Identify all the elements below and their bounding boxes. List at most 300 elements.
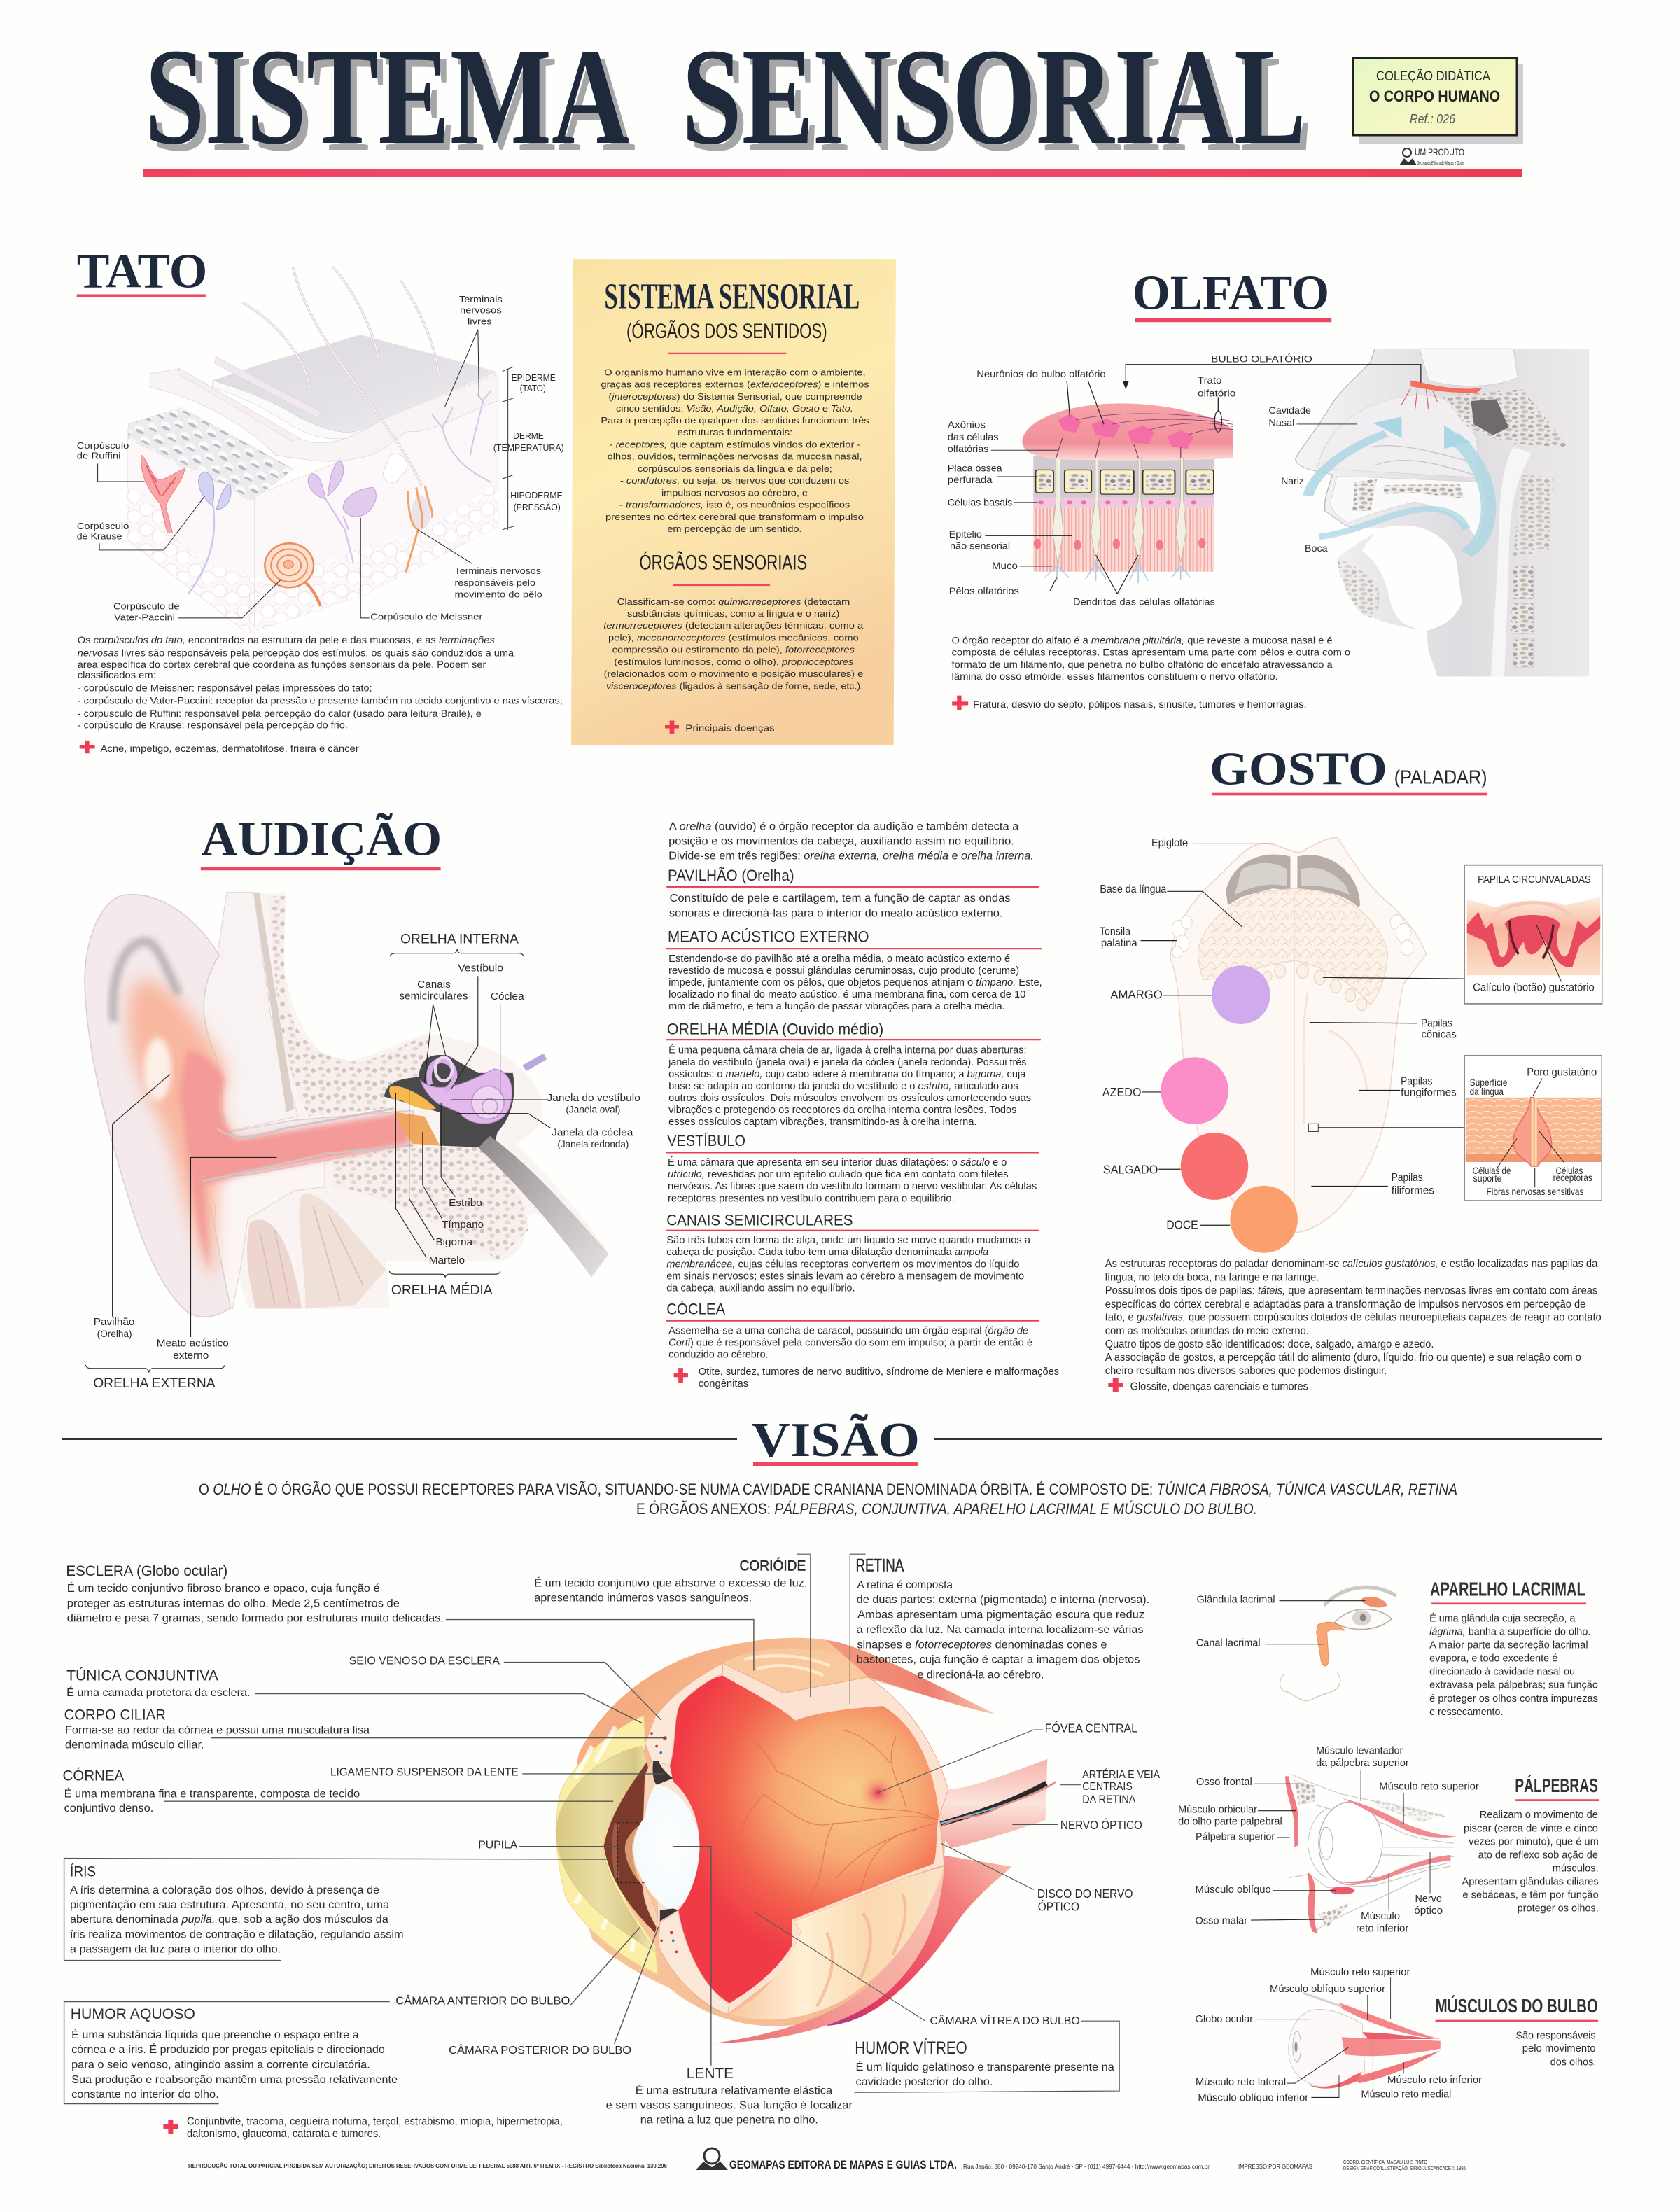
- skin labels: DERME: [513, 430, 544, 441]
- text: aparelho lacrimal: evapora, e todo excedente é: [1429, 1652, 1558, 1664]
- panel: visao: [62, 1413, 1602, 2043]
- icon: red cross with visao diseases: [163, 2116, 563, 2140]
- skin labels: (PRESSÃO): [514, 502, 561, 512]
- panel: tato: [77, 244, 564, 755]
- title: Sistema Sensorial: SENSORIAL: [688, 27, 1312, 180]
- text: classification: visceroceptores (ligados à sensação de fome, sede, etc.).: [606, 681, 863, 692]
- text: olfato description: lâmina do osso etmóide; esses filamentos constituem o nervo olfatório.: [952, 671, 1278, 682]
- text: aparelho lacrimal: extravasa pela pálpebras; sua função: [1429, 1679, 1598, 1690]
- collection badge: [1353, 58, 1523, 144]
- lacrimal labels: [1196, 1593, 1365, 1648]
- text: audicao intro: A orelha (ouvido) é o órgão receptor da audição e também detecta a: [669, 820, 1019, 832]
- eyelid labels: Nervo: [1415, 1893, 1442, 1905]
- section: meato acustico externo: [666, 927, 1042, 1011]
- section: orelha media: É uma pequena câmara cheia de ar, ligada à orelha interna por duas aberturas:: [668, 1043, 1027, 1056]
- text: olfato description: [952, 636, 1350, 682]
- lacrimal labels: Glândula lacrimal: [1197, 1593, 1275, 1605]
- text: gosto description: Quatro tipos de gosto são identificados: doce, salgado, amargo e azedo.: [1105, 1338, 1434, 1350]
- icon: red cross with tato diseases: Acne, impetigo, eczemas, dermatofitose, frieira e câncer: [101, 743, 359, 755]
- olfato labels: olfatórias: [948, 444, 988, 454]
- text box: humor aquoso: córnea e a íris. É produzido por pregas epiteliais e direcionado: [71, 2043, 385, 2056]
- label: disco do nervo optico: [941, 1843, 1133, 1914]
- skin labels: EPIDERME: [512, 372, 556, 383]
- olfato labels: BULBO OLFATÓRIO: [1211, 354, 1312, 365]
- text: palpebras: Realizam o movimento de: [1480, 1809, 1598, 1820]
- text: gosto description: com as moléculas oriundas do meio externo.: [1105, 1325, 1309, 1337]
- section: orelha media: janela do vestíbulo (janela oval) e janela da cóclea (janela redonda). Possui três: [668, 1056, 1027, 1068]
- audicao labels: ORELHA EXTERNA: [93, 1376, 216, 1390]
- eyelid labels: Músculo reto superior: [1379, 1780, 1480, 1792]
- eye muscle labels: Músculo reto medial: [1362, 2088, 1451, 2100]
- section: vestibulo: É uma câmara que apresenta em seu interior duas dilatações: o sáculo e o: [668, 1156, 1007, 1168]
- gosto labels: Tonsila: [1100, 926, 1131, 938]
- eye muscle labels: [1196, 1966, 1483, 2104]
- skin labels: responsáveis pelo: [455, 578, 536, 588]
- skin labels: Terminais: [459, 294, 503, 304]
- inset: papila circunvaladas: Calículo (botão) gustatório: [1473, 982, 1595, 994]
- text: gosto description: tato, e gustativas, que possuem corpúsculos dotados de células neuroepiteliais capazes de reagir ao contato: [1105, 1311, 1602, 1324]
- olfato labels: Dendritos das células olfatórias: [1073, 596, 1215, 608]
- text: gosto description: específicas do córtex cerebral e adaptadas para a transformação de impulsos nervosos em percepção de: [1105, 1298, 1586, 1310]
- olfato labels: Trato: [1198, 375, 1222, 386]
- text: lente: na retina a luz que penetra no olho.: [640, 2114, 818, 2127]
- illustration: tongue: [1170, 837, 1427, 1233]
- olfato labels: Boca: [1305, 543, 1328, 554]
- text: intro: estruturas fundamentais:: [678, 428, 792, 438]
- text: aparelho lacrimal: APARELHO LACRIMAL: [1430, 1579, 1586, 1600]
- section: canais semicirculares: [666, 1212, 1039, 1294]
- gosto labels: AMARGO: [1110, 988, 1163, 1002]
- text box: iris: ÍRIS: [70, 1864, 96, 1880]
- label: nervo optico: NERVO ÓPTICO: [1060, 1818, 1142, 1833]
- illustration: eyelids section: [1285, 1774, 1457, 1933]
- panel: olfato: [948, 266, 1589, 710]
- text: tato description: - corpúsculo de Meissner: responsável pelas impressões do tato;: [78, 683, 372, 694]
- text: gosto description: cheiro resultam nos diversos sabores que podemos distinguir.: [1105, 1365, 1387, 1377]
- icon: red cross with visao diseases: Conjuntivite, tracoma, cegueira noturna, terçol, estrabismo, miopia, hipermetropia,: [187, 2116, 563, 2128]
- panel: audicao text: [666, 820, 1059, 1389]
- olfato labels: das células: [948, 432, 999, 442]
- taste zones: [1161, 965, 1298, 1253]
- eye muscle labels: Músculo reto superior: [1310, 1966, 1410, 1977]
- inset: papila fungiforme: receptoras: [1553, 1172, 1592, 1183]
- audicao labels: ORELHA INTERNA: [400, 931, 519, 946]
- icon: red cross with gosto diseases: [1108, 1378, 1308, 1393]
- text: retina: bastonetes, cuja função é captar a imagem dos objetos: [857, 1653, 1140, 1665]
- text: palpebras: e sebáceas, e têm por função: [1462, 1889, 1599, 1900]
- text: classification: (relacionados com o movimento e posição musculares) e: [604, 669, 863, 679]
- illustration: eye muscles: [1289, 1993, 1441, 2089]
- section: vestibulo: [666, 1133, 1040, 1204]
- text: retina: a reflexão da luz. Na camada interna localizam-se várias: [857, 1623, 1144, 1636]
- skin labels: de Ruffini: [77, 451, 120, 461]
- collection badge: O CORPO HUMANO: [1369, 88, 1500, 105]
- title: Sistema Sensorial: [145, 20, 1312, 180]
- text: classification: compressão ou estiramento da pele), fotorreceptores: [612, 645, 855, 655]
- eye muscle labels: Globo ocular: [1196, 2012, 1254, 2024]
- copyright note: REPRODUÇÃO TOTAL OU PARCIAL PROIBIDA SEM AUTORIZAÇÃO; DIREITOS RESERVADOS CONFORME LEI FEDERAL 5988 ART. 6º ITEM IX - REGISTRO Biblioteca Nacional 130.296: [188, 2163, 668, 2169]
- text box: humor vitreo: cavidade posterior do olho.: [855, 2076, 993, 2088]
- text: audicao intro: posição e os movimentos da cabeça, auxiliando assim no equilíbrio.: [668, 834, 1014, 847]
- audicao labels: Bigorna: [435, 1236, 473, 1248]
- eyelid labels: [1178, 1744, 1480, 1934]
- label: seio venoso: SEIO VENOSO DA ESCLERA: [349, 1654, 500, 1667]
- label: ligamento suspensor: LIGAMENTO SUSPENSOR DA LENTE: [330, 1766, 519, 1779]
- skin labels: livres: [468, 316, 492, 327]
- text: corpo ciliar: CORPO CILIAR: [64, 1707, 166, 1723]
- text box: humor aquoso: Sua produção e reabsorção mantêm uma pressão relativamente: [71, 2073, 398, 2086]
- text: lente: [606, 1847, 853, 2127]
- text: aparelho lacrimal: direcionado à cavidade nasal ou: [1429, 1665, 1575, 1677]
- text: palpebras: proteger os olhos.: [1518, 1902, 1599, 1914]
- label: fovea central: FÓVEA CENTRAL: [1045, 1721, 1138, 1735]
- text: classification: pele), mecanorreceptores (estímulos mecânicos, como: [608, 633, 859, 643]
- text: classification: susbtâncias químicas, como a língua e o nariz): [627, 609, 839, 620]
- icon: red cross with audicao diseases: Otite, surdez, tumores de nervo auditivo, síndrome de Meniere e malformações: [699, 1366, 1059, 1377]
- inset: papila fungiforme: da língua: [1470, 1086, 1504, 1097]
- section: meato acustico externo: impede, juntamente com os pêlos, que objetos pequenos atinjam o tímpano. Este,: [668, 976, 1042, 988]
- text box: iris: pigmentação em sua estrutura. Apresenta, no seu centro, uma: [70, 1898, 389, 1911]
- text: gosto description: A associação de gostos, a percepção tátil do alimento (duro, líquido, frio ou quente) e sua relação com o: [1105, 1352, 1581, 1364]
- inset: papila fungiforme: Superfície: [1470, 1077, 1507, 1088]
- audicao labels: Tímpano: [442, 1219, 484, 1231]
- section: vestibulo: nervósos. As fibras que saem do vestíbulo formam o nervo vestibular. As células: [668, 1180, 1037, 1192]
- text: intro: corpúsculos sensoriais da língua e da pele;: [638, 464, 832, 475]
- eyelid labels: Pálpebra superior: [1196, 1830, 1275, 1842]
- text: lente: É uma estrutura relativamente elástica: [636, 2083, 832, 2096]
- text: tato description: - corpúsculo de Vater-Paccini: receptor da pressão e presente também no tecido conjuntivo e nas vísceras;: [78, 696, 563, 706]
- eyelid labels: Músculo orbicular: [1178, 1803, 1258, 1815]
- section: orelha media: vibrações e protegendo os receptores da orelha interna contra lesões. Todos: [668, 1104, 1016, 1115]
- section: orelha media: outros dois ossículos. Dois músculos envolvem os ossículos amortecendo suas: [668, 1092, 1031, 1103]
- skin labels: Vater-Paccini: [114, 612, 175, 623]
- heading: Gosto: [1210, 744, 1488, 795]
- inset: papila fungiforme: suporte: [1474, 1172, 1502, 1184]
- inset: papila fungiforme: Fibras nervosas sensitivas: [1487, 1186, 1583, 1197]
- text: gosto description: [1105, 1258, 1602, 1377]
- publisher address: Rua Japão, 380 - 09240-170 Santo André - SP - (011) 4997-6444 - http://www.geomapas.com.br: [963, 2164, 1210, 2170]
- text: retina: RETINA: [855, 1555, 904, 1575]
- icon: red cross with olfato diseases: Fratura, desvio do septo, pólipos nasais, sinusite, tumores e hemorragias.: [973, 699, 1307, 710]
- audicao labels: Canais: [417, 979, 451, 990]
- skin labels: Corpúsculo: [77, 440, 129, 451]
- olfato labels: Células basais: [948, 498, 1012, 508]
- text: cornea: [62, 1768, 613, 1814]
- eyelid labels: Osso malar: [1196, 1914, 1248, 1926]
- text: intro: - transformadores, isto é, os neurônios específicos: [620, 500, 850, 510]
- skin labels: movimento do pêlo: [455, 589, 542, 599]
- section: meato acustico externo: Estendendo-se do pavilhão até a orelha média, o meato acústico externo é: [668, 953, 1010, 964]
- audicao labels: (Janela oval): [566, 1104, 620, 1115]
- illustration: eyeball cross-section: [556, 1638, 1056, 2043]
- gosto labels: SALGADO: [1103, 1163, 1158, 1177]
- section: pavilhao: [666, 867, 1039, 919]
- panel title: SISTEMA SENSORIAL: [604, 275, 860, 316]
- section: meato acustico externo: MEATO ACÚSTICO EXTERNO: [668, 927, 869, 946]
- text: olfato description: composta de células receptoras. Estas apresentam uma parte com pêlos e outra com o: [952, 647, 1350, 658]
- gosto labels: Papilas: [1421, 1018, 1452, 1030]
- icon: red cross with audicao diseases: [674, 1366, 1059, 1389]
- text: tunica conjuntiva: [66, 1668, 643, 1723]
- section: canais semicirculares: membranácea, cujas células receptoras convertem os movimentos do líquido: [666, 1258, 1020, 1270]
- text: tato description: - corpúsculo de Krause: responsável pela percepção do frio.: [78, 720, 348, 731]
- text: audicao intro: [668, 820, 1034, 862]
- section: pavilhao: sonoras e direcioná-las para o interior do meato acústico externo.: [669, 907, 1002, 919]
- icon: red cross with audicao diseases: congênitas: [699, 1378, 748, 1389]
- label: arteria e veia: [1060, 1768, 1160, 1805]
- text: retina: sinapses e fotorreceptores denominadas cones e: [857, 1638, 1107, 1651]
- section: meato acustico externo: mm de diâmetro, e tem a função de passar vibrações para a orelha média.: [668, 1000, 1005, 1011]
- text: retina: Ambas apresentam uma pigmentação escura que reduz: [858, 1608, 1144, 1620]
- text: intro: - receptores, que captam estímulos vindos do exterior -: [610, 440, 860, 450]
- audicao labels: Vestíbulo: [458, 962, 503, 974]
- illustration: ear cross-section: [85, 892, 609, 1317]
- text: aparelho lacrimal: lágrima, banha a superfície do olho.: [1429, 1625, 1590, 1637]
- text: tunica conjuntiva: É uma camada protetora da esclera.: [66, 1686, 251, 1699]
- section: canais semicirculares: CANAIS SEMICIRCULARES: [666, 1212, 853, 1229]
- olfato labels: Muco: [992, 561, 1018, 571]
- skin block illustration: [127, 267, 498, 634]
- credits: COORD. CIENTÍFICA: MAGALI LUÍS PINTO: [1343, 2159, 1427, 2165]
- text: aparelho lacrimal: é proteger os olhos contra impurezas: [1429, 1692, 1598, 1704]
- icon: red cross with olfato diseases: [952, 696, 1307, 710]
- eyelid labels: Músculo levantador: [1316, 1744, 1404, 1756]
- text: gosto description: língua, no teto da boca, na faringe e na laringe.: [1105, 1272, 1319, 1284]
- audicao labels: (Orelha): [97, 1329, 132, 1339]
- text: visao intro: E ÓRGÃOS ANEXOS: PÁLPEBRAS, CONJUNTIVA, APARELHO LACRIMAL E MÚSCULO DO BULBO.: [636, 1500, 1257, 1518]
- section: orelha media: ossículos: o martelo, cujo cabo adere à membrana do tímpano; a bigorna, cuja: [668, 1068, 1027, 1079]
- text: musculos do bulbo: pelo movimento: [1522, 2043, 1596, 2054]
- audicao labels: externo: [173, 1350, 209, 1362]
- text box: humor vitreo: HUMOR VÍTREO: [855, 2038, 967, 2058]
- label: fovea central: [878, 1721, 1138, 1793]
- text box: humor aquoso: É uma substância líquida que preenche o espaço entre a: [71, 2028, 359, 2041]
- olfato labels: Epitélio: [949, 529, 982, 540]
- skin labels: HIPODERME: [510, 490, 563, 500]
- audicao labels: ORELHA MÉDIA: [391, 1282, 493, 1297]
- skin labels: Corpúsculo de Meissner: [370, 611, 483, 622]
- text: musculos do bulbo: MÚSCULOS DO BULBO: [1436, 1996, 1598, 2017]
- text: aparelho lacrimal: e ressecamento.: [1429, 1706, 1503, 1717]
- label: disco do nervo optico: ÓPTICO: [1038, 1900, 1079, 1914]
- gosto labels: Papilas: [1401, 1076, 1432, 1088]
- section: coclea: Corti ) que é responsável pela conversão do som em impulso; a partir de então é: [668, 1336, 1032, 1348]
- text: retina: A retina é composta: [857, 1578, 953, 1590]
- audicao labels: Meato acústico: [157, 1337, 229, 1349]
- eyelid labels: óptico: [1414, 1905, 1443, 1917]
- panel title: [604, 275, 860, 354]
- eye muscle labels: Músculo reto inferior: [1387, 2074, 1483, 2085]
- gosto labels: Epiglote: [1152, 837, 1188, 849]
- header: [144, 20, 1523, 180]
- olfato labels: perfurada: [948, 475, 993, 485]
- text: tato description: classificados em:: [78, 670, 156, 681]
- icon: red cross with visao diseases: daltonismo, glaucoma, catarata e tumores.: [187, 2128, 381, 2140]
- text box: humor aquoso: constante no interior do olho.: [71, 2088, 219, 2101]
- gosto labels: cônicas: [1422, 1028, 1457, 1041]
- text: musculos do bulbo: [1436, 1996, 1598, 2068]
- collection badge: Ref.: 026: [1410, 112, 1456, 126]
- eyelid labels: Músculo: [1361, 1910, 1400, 1921]
- gosto labels: Base da língua: [1100, 883, 1167, 896]
- text: esclera: É um tecido conjuntivo fibroso branco e opaco, cuja função é: [67, 1581, 380, 1595]
- section: vestibulo: receptoras presentes no vestíbulo contribuem para o equilíbrio.: [668, 1193, 955, 1204]
- text box: iris: íris realiza movimentos de contração e dilatação, regulando assim: [70, 1928, 404, 1940]
- text: intro: [601, 368, 869, 534]
- text box: iris: a passagem da luz para o interior do olho.: [70, 1942, 281, 1955]
- audicao labels: Janela do vestíbulo: [547, 1092, 640, 1104]
- publisher mark: UM PRODUTO: [1415, 146, 1464, 158]
- olfato labels: Pêlos olfatórios: [949, 586, 1019, 596]
- text: cornea: conjuntivo denso.: [64, 1802, 153, 1814]
- section: coclea: Assemelha-se a uma concha de caracol, possuindo um órgão espiral ( órgão de: [668, 1324, 1028, 1336]
- label: pupila: PUPILA: [478, 1839, 518, 1851]
- audicao labels: semicirculares: [399, 990, 468, 1002]
- section: meato acustico externo: localizado no final do meato acústico, é uma membrana fina, com cerca de 10: [668, 988, 1026, 1000]
- inset: papila fungiforme: Células de: [1473, 1165, 1511, 1176]
- text: classification: (estímulos luminosos, como o olho), proprioceptores: [614, 657, 854, 668]
- credits: DESIGN GRÁFICO/ILUSTRAÇÃO: SIRIO JUSCANCADE © 1995: [1343, 2165, 1466, 2171]
- audicao labels: [85, 931, 640, 1390]
- text: intro: O organismo humano vive em interação com o ambiente,: [604, 368, 866, 378]
- skin labels: (TATO): [520, 383, 546, 393]
- text: classification: [603, 597, 864, 692]
- inset: papila fungiforme: Células: [1556, 1165, 1583, 1176]
- section: orelha media: [666, 1021, 1041, 1127]
- text: olfato description: formato de um filamento, que penetra no bulbo olfatório do encéfalo atravessando a: [952, 659, 1333, 670]
- olfato labels: olfatório: [1198, 388, 1236, 399]
- text: musculos do bulbo: dos olhos.: [1550, 2056, 1596, 2068]
- inset: papila circunvaladas: PAPILA CIRCUNVALADAS: [1478, 874, 1591, 885]
- text: intro: cinco sentidos: Visão, Audição, Olfato, Gosto e Tato.: [616, 403, 853, 414]
- panel: gosto: [1100, 744, 1602, 1393]
- text: visao intro: [199, 1480, 1457, 1518]
- heading: orgaos sensoriais: ÓRGÃOS SENSORIAIS: [639, 551, 807, 575]
- title: Sistema Sensorial: SISTEMA: [151, 27, 636, 180]
- text: corpo ciliar: [64, 1707, 666, 1751]
- text: palpebras: piscar (cerca de vinte e cinco: [1464, 1822, 1598, 1834]
- section: vestibulo: VESTÍBULO: [667, 1133, 746, 1150]
- title red rule: [144, 169, 1522, 177]
- label: camara posterior: [449, 1927, 659, 2057]
- eyelid labels: do olho parte palpebral: [1178, 1815, 1282, 1827]
- eye muscle labels: Músculo reto lateral: [1196, 2076, 1286, 2087]
- audicao labels: Janela da cóclea: [552, 1126, 634, 1139]
- skin labels: Terminais nervosos: [455, 566, 541, 576]
- section: canais semicirculares: São três tubos em forma de alça, onde um líquido se move quando mudamos a: [666, 1234, 1031, 1245]
- olfato labels: não sensorial: [950, 541, 1010, 552]
- text: cornea: É uma membrana fina e transparente, composta de tecido: [64, 1787, 360, 1800]
- illustration: head section: [1296, 349, 1589, 676]
- skin layer brackets: [503, 367, 514, 530]
- skin labels: Corpúsculo de: [113, 601, 180, 612]
- text: aparelho lacrimal: É uma glândula cuja secreção, a: [1429, 1612, 1576, 1624]
- text: esclera: [66, 1563, 754, 1671]
- section: coclea: [666, 1300, 1039, 1360]
- olfato labels: Cavidade: [1268, 405, 1311, 416]
- text: intro: olhos, ouvidos, terminações nervosas da mucosa nasal,: [608, 451, 862, 462]
- text: retina: de duas partes: externa (pigmentada) e interna (nervosa).: [857, 1593, 1149, 1606]
- eyelid labels: da pálpebra superior: [1316, 1757, 1409, 1768]
- text: intro: graças aos receptores externos ( exteroceptores ) e internos: [601, 379, 869, 390]
- inset: papila fungiforme: Poro gustatório: [1527, 1066, 1597, 1079]
- icon: red cross with gosto diseases: Glossite, doenças carenciais e tumores: [1130, 1380, 1308, 1393]
- text: intro: em percepção de um sentido.: [667, 524, 802, 534]
- text box: iris: abertura denominada pupila, que, sob a ação dos músculos da: [70, 1913, 388, 1926]
- audicao labels: Pavilhão: [94, 1316, 134, 1328]
- illustration: olfactory epithelium: [1022, 403, 1233, 583]
- text: olfato description: O órgão receptor do alfato é a membrana pituitária, que reveste a mucosa nasal e é: [952, 636, 1333, 646]
- panel: visao left text: [62, 1558, 853, 2140]
- label: camara posterior: CÂMARA POSTERIOR DO BULBO: [449, 2043, 631, 2057]
- text: intro: Para a percepção de qualquer dos sentidos funcionam três: [601, 416, 869, 426]
- panel title: (ÓRGÃOS DOS SENTIDOS): [626, 320, 827, 343]
- section: meato acustico externo: revestido de mucosa e possui glândulas ceruminosas, cujo produto (cerume): [668, 965, 1019, 976]
- label: disco do nervo optico: DISCO DO NERVO: [1037, 1888, 1133, 1901]
- section: canais semicirculares: cabeça de posição. Cada tubo tem uma dilatação denominada ampola: [666, 1246, 988, 1257]
- olfato labels: Nariz: [1281, 476, 1304, 486]
- text: corioide: [534, 1558, 807, 1604]
- eyelid labels: reto inferior: [1356, 1922, 1409, 1934]
- audicao labels: Estribo: [449, 1197, 482, 1209]
- collection badge: COLEÇÃO DIDÁTICA: [1376, 69, 1490, 84]
- text: intro: - condutores, ou seja, os nervos que conduzem os: [620, 476, 850, 486]
- eye muscle labels: Músculo oblíquo superior: [1270, 1983, 1386, 1994]
- inset: papila circunvaladas: [1464, 865, 1602, 1004]
- section: coclea: CÓCLEA: [666, 1300, 725, 1318]
- panel: visao right text: [755, 1554, 1160, 2092]
- text: gosto description: Possuímos dois tipos de papilas: táteis, que apresentam terminações nervosas livres em contato com áreas: [1105, 1284, 1597, 1297]
- skin labels: nervosos: [460, 305, 502, 316]
- credits: [1343, 2159, 1466, 2171]
- panel: anexos do olho: [1178, 1579, 1600, 2104]
- publisher mark: Geomapas Editora de Mapas e Guias: [1417, 161, 1464, 166]
- audicao labels: (Janela redonda): [557, 1139, 629, 1149]
- text: palpebras: vezes por minuto), que é um: [1469, 1835, 1599, 1847]
- text box: humor vitreo: CÂMARA VÍTREA DO BULBO: [930, 2015, 1080, 2026]
- label: seio venoso: [349, 1654, 661, 1720]
- olfato labels: [948, 354, 1421, 608]
- olfato labels: Neurônios do bulbo olfatório: [976, 369, 1106, 379]
- text: gosto description: As estruturas receptoras do paladar denominam-se calículos gustatórios, e estão localizadas nas papilas da: [1105, 1258, 1598, 1270]
- text: palpebras: [1462, 1774, 1600, 1914]
- text: palpebras: ato de reflexo sob ação de: [1478, 1849, 1598, 1861]
- skin labels: [77, 294, 564, 623]
- section: vestibulo: utrículo, revestidas por um epitélio culiado que fica em contato com filetes: [668, 1168, 1009, 1180]
- gosto labels: fungiformes: [1401, 1086, 1457, 1099]
- text: cornea: CÓRNEA: [62, 1768, 124, 1784]
- label: arteria e veia: DA RETINA: [1082, 1793, 1136, 1805]
- text: palpebras: Apresentam glândulas ciliares: [1462, 1875, 1599, 1887]
- text: palpebras: músculos.: [1553, 1862, 1599, 1874]
- text box: humor aquoso: CÂMARA ANTERIOR DO BULBO: [396, 1994, 570, 2008]
- icon: red cross legend: Principais doenças: [685, 723, 775, 734]
- skin labels: de Krause: [77, 531, 122, 541]
- text: retina: [797, 1554, 1149, 1704]
- heading: Tato: TATO: [77, 244, 207, 298]
- heading: Audicao: AUDIÇÃO: [201, 812, 442, 867]
- text: tato description: Os corpúsculos do tato, encontrados na estrutura da pele e das mucosas, e as terminações: [78, 635, 495, 646]
- text: intro: impulsos nervosos ao cérebro, e: [662, 488, 808, 498]
- gosto labels: palatina: [1101, 937, 1138, 949]
- gosto labels: AZEDO: [1102, 1086, 1142, 1099]
- text: lente: e sem vasos sanguíneos. Sua função é focalizar: [606, 2099, 853, 2112]
- text: aparelho lacrimal: [1429, 1579, 1598, 1717]
- label: arteria e veia: CENTRAIS: [1082, 1780, 1133, 1793]
- section: canais semicirculares: da cabeça, auxiliando assim no equilíbrio.: [666, 1282, 855, 1294]
- lacrimal labels: Canal lacrimal: [1196, 1637, 1261, 1648]
- text: esclera: proteger as estruturas internas do olho. Mede 2,5 centímetros de: [67, 1597, 400, 1609]
